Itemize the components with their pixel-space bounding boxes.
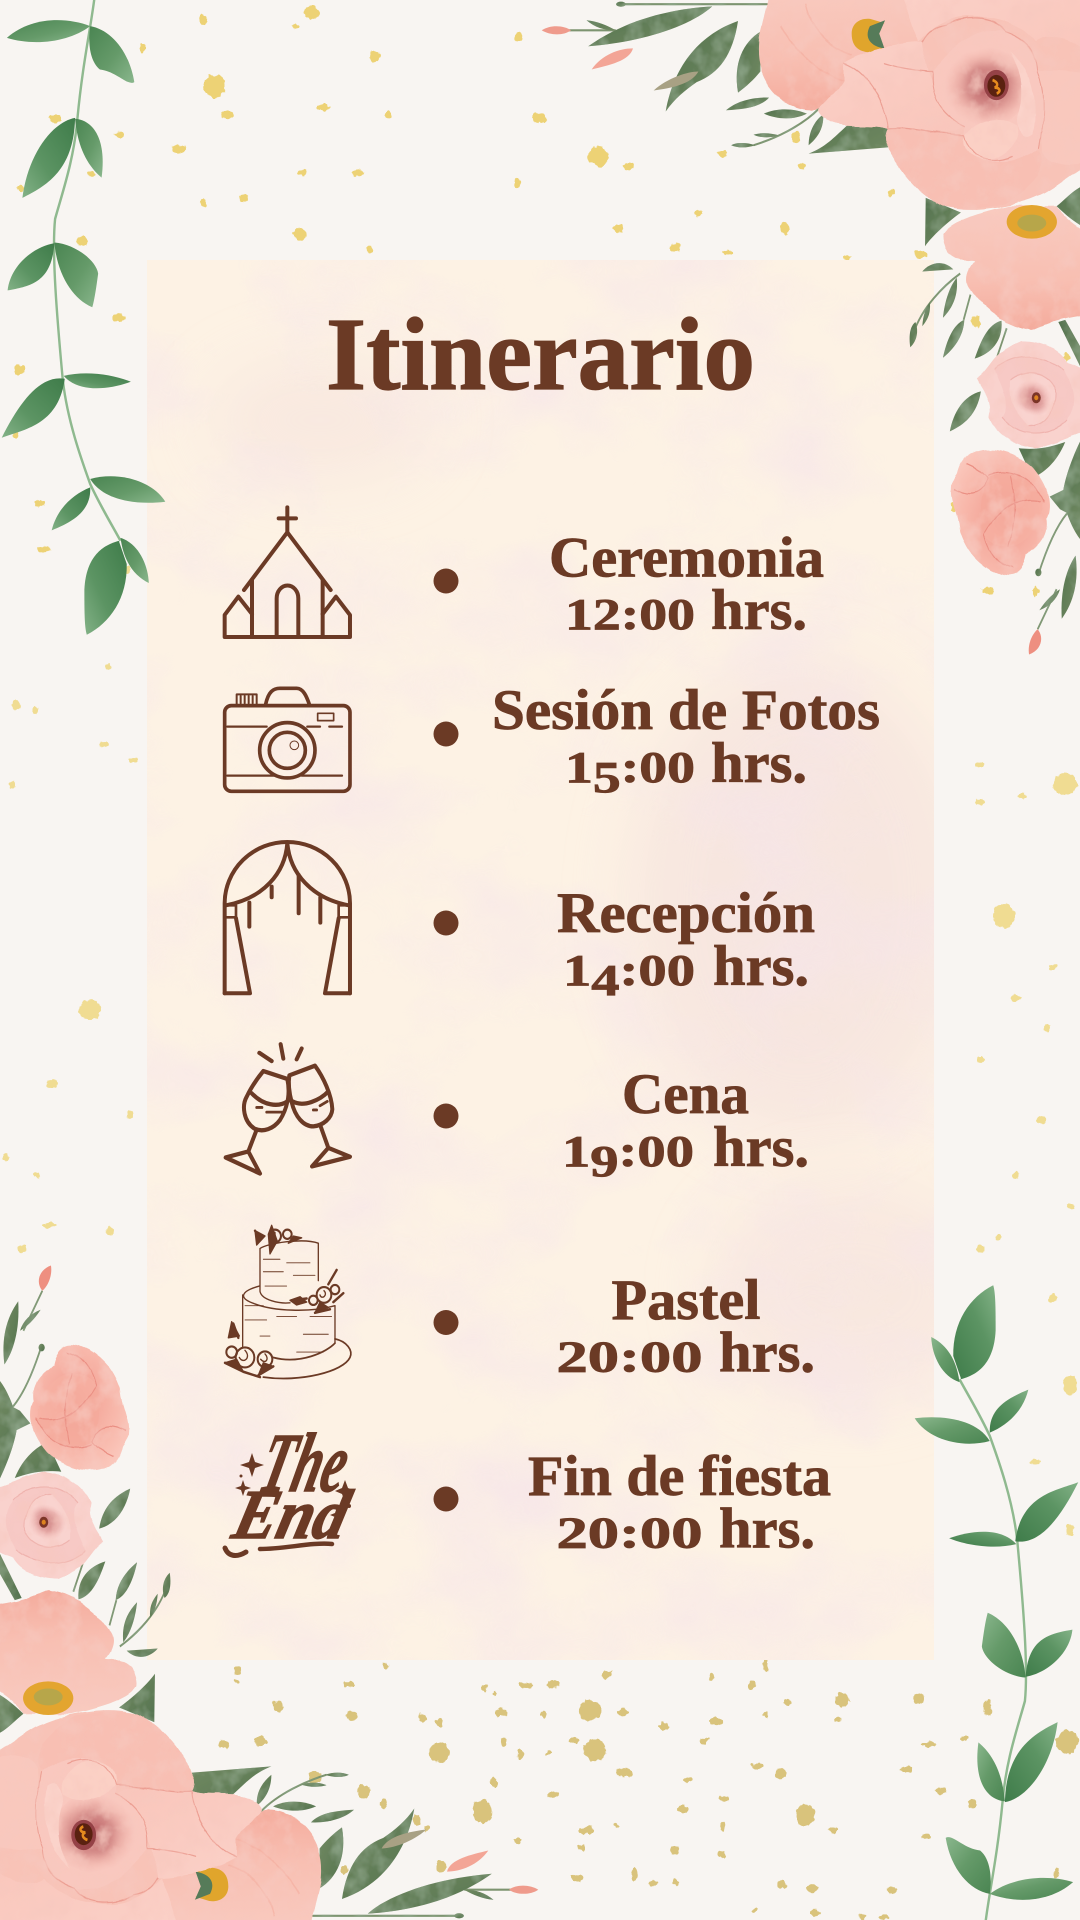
buds [542, 26, 571, 34]
poppy: upper left [758, 0, 933, 110]
icon: wedding cake [225, 1225, 351, 1379]
row: fin de fiesta [528, 1445, 831, 1560]
large rose center [984, 70, 1009, 100]
bullet dots [434, 568, 458, 1512]
icon: the end lettering [225, 1417, 359, 1555]
floral: top right corner [542, 0, 1080, 654]
row: recepcion: :00 [620, 946, 695, 995]
confetti: top right [539, 115, 1072, 597]
row: recepcion: hrs. [713, 935, 809, 998]
icon: the end lettering: End [225, 1477, 359, 1554]
icon: toasting glasses [226, 1044, 350, 1174]
row: recepcion: 1 [563, 946, 585, 995]
panel: itinerary paper [147, 260, 990, 1660]
title: Itinerario [326, 297, 755, 412]
poppy center: upper [852, 19, 885, 52]
poppy center: lower [1007, 205, 1057, 239]
confetti: left and right margins [3, 566, 1077, 1536]
row: ceremonia: hrs. [711, 579, 807, 642]
row: cena [562, 1063, 809, 1186]
row: fin de fiesta: hrs. [719, 1498, 815, 1560]
confetti: bottom right [540, 1660, 1078, 1920]
row: pastel: Pastel [612, 1269, 760, 1332]
row: fin de fiesta: Fin de fiesta [528, 1445, 831, 1508]
row: pastel: hrs. [719, 1322, 815, 1384]
small pale rose [977, 341, 1080, 448]
row: cena: 9 [590, 1137, 619, 1186]
row: cena: hrs. [713, 1116, 809, 1179]
foliage [561, 2, 1080, 629]
row: ceremonia: 12:00 [565, 590, 695, 639]
poppy: lower right [943, 206, 1080, 330]
row: recepcion: 4 [591, 956, 620, 1005]
row: cena: Cena [622, 1063, 749, 1126]
icon: wedding arch [225, 842, 350, 993]
row: sesion de fotos: :00 [621, 743, 695, 792]
icon: camera [225, 688, 350, 791]
row: cena: 1 [562, 1127, 584, 1176]
large rose [818, 0, 1080, 210]
row: sesion de fotos: 1 [565, 743, 587, 792]
confetti: bottom left [185, 1663, 532, 1874]
row: sesion de fotos [492, 679, 880, 802]
row: cena: :00 [619, 1127, 694, 1176]
row: sesion de fotos: 5 [593, 753, 621, 802]
row: fin de fiesta: 20:00 [556, 1508, 702, 1558]
small rose center [1032, 392, 1041, 403]
row: sesion de fotos: hrs. [711, 732, 807, 795]
row: ceremonia [549, 526, 824, 642]
row: pastel: 20:00 [556, 1332, 702, 1382]
row: sesion de fotos: Sesión de Fotos [492, 679, 880, 742]
confetti: top left [13, 6, 541, 552]
coral rose [951, 450, 1049, 575]
vine: bottom right [915, 1285, 1078, 1920]
vine: top left [2, 0, 165, 635]
icon: the end lettering: The [251, 1417, 358, 1510]
row: pastel [556, 1269, 815, 1384]
floral: bottom left corner [0, 1266, 538, 1920]
icon: church [225, 507, 350, 637]
row: ceremonia: Ceremonia [549, 526, 824, 590]
row: recepcion: Recepción [557, 882, 815, 945]
row: recepcion [557, 882, 815, 1005]
